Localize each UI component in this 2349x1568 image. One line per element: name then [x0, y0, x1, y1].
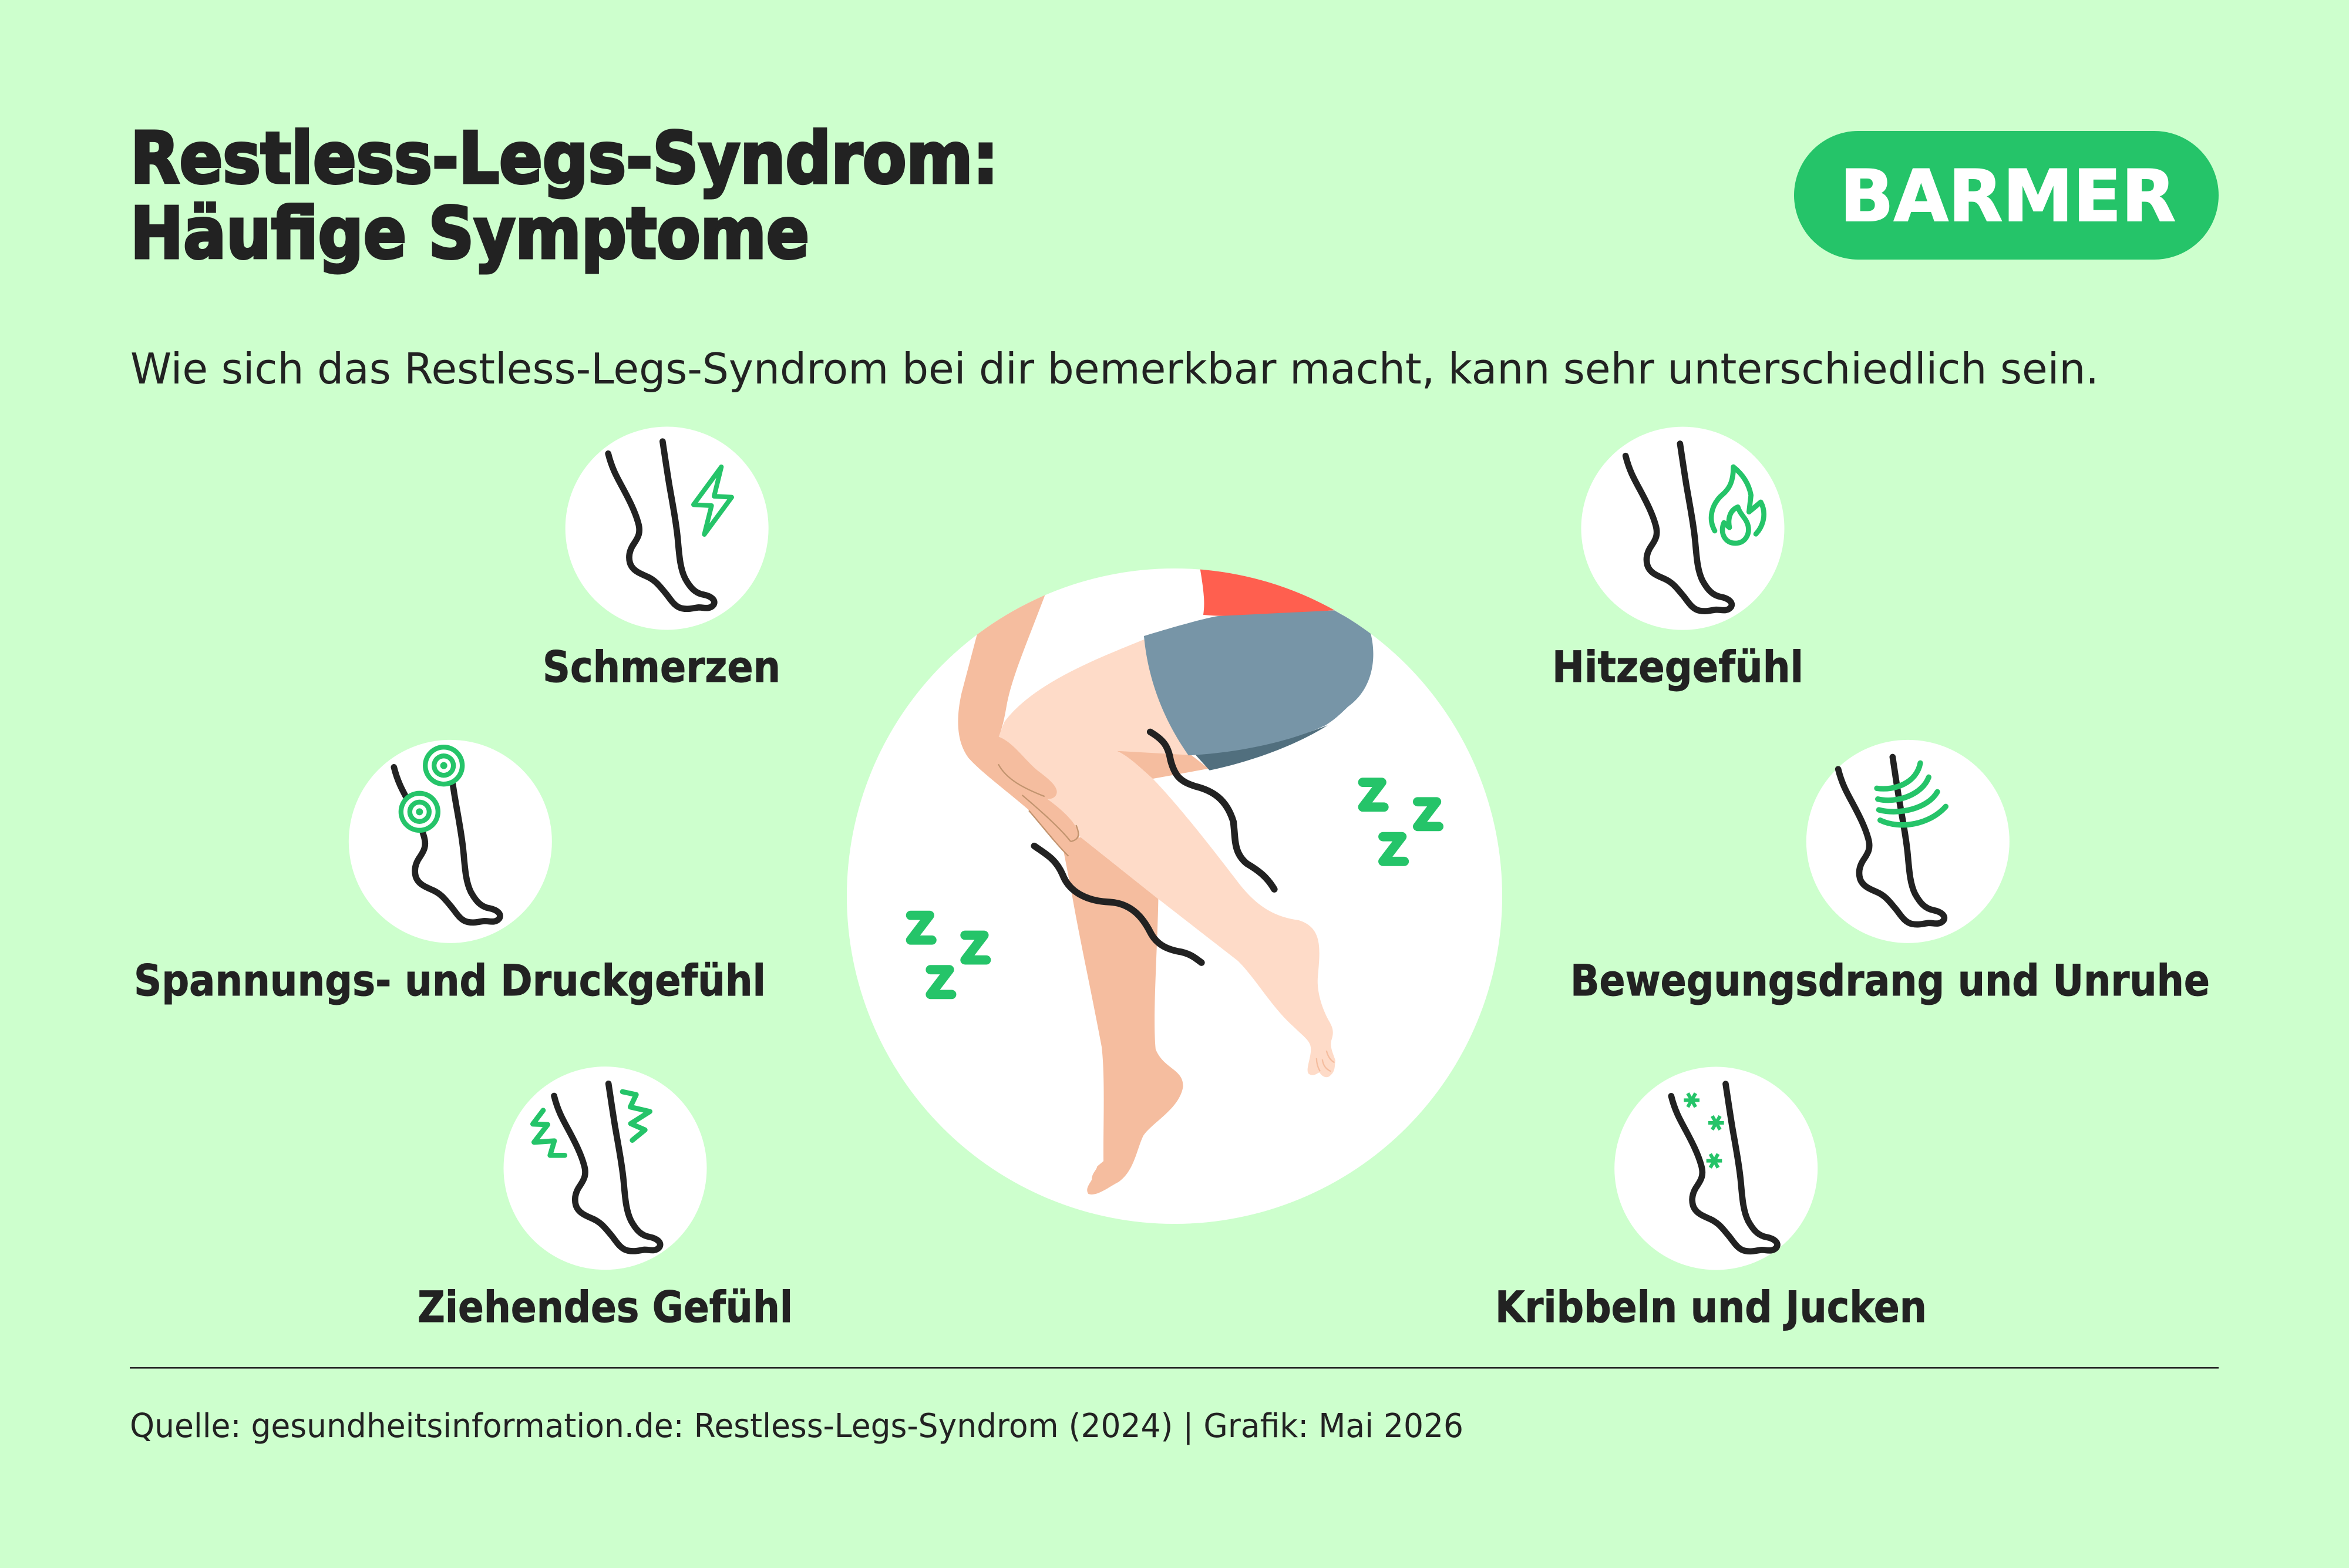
back thigh [1116, 751, 1209, 779]
icon: Ziehendes Gefühl leg with zigzags [503, 1066, 706, 1270]
logo: BARMER: BARMER [1840, 155, 2176, 238]
icon: lightning bolt [694, 467, 732, 534]
right Z cluster [1363, 782, 1439, 862]
icon: left zigzag [533, 1111, 565, 1155]
title: Häufige Symptome [130, 193, 809, 275]
shorts [1144, 610, 1373, 755]
title [130, 118, 998, 275]
label: Spannungs- und Druckgefühl: Spannungs- und Druckgefühl [134, 956, 766, 1006]
icon: inner flame [1722, 507, 1748, 543]
subtitle: Wie sich das Restless-Legs-Syndrom bei dir bemerkbar macht, kann sehr unterschiedlich sein. [130, 344, 2099, 393]
title: Restless-Legs-Syndrom: [130, 118, 998, 200]
icon: Schmerzen leg with lightning [566, 426, 769, 630]
label: Ziehendes Gefühl: Ziehendes Gefühl [418, 1283, 793, 1333]
label: Schmerzen: Schmerzen [543, 642, 780, 692]
icon: Spannungs- und Druckgefühl leg with targets [349, 740, 552, 943]
icon: outer flame [1711, 467, 1764, 534]
icon: Bewegungsdrang leg with motion arcs [1806, 740, 2010, 943]
icon: right zigzag [622, 1092, 650, 1140]
finger lines [998, 764, 1078, 856]
shorts shadow [1195, 725, 1328, 770]
icon: upper target [423, 745, 465, 786]
icon: Hitzegefühl leg with flame [1581, 427, 1784, 630]
toe lines [1317, 1051, 1334, 1071]
source line: Quelle: gesundheitsinformation.de: Restless-Legs-Syndrom (2024) | Grafik: Mai 2026 [130, 1407, 1463, 1445]
label: Hitzegefühl: Hitzegefühl [1552, 642, 1803, 692]
icon: asterisks [1684, 1093, 1724, 1167]
icon: motion arcs [1877, 763, 1946, 825]
icon: Kribbeln leg with asterisks [1614, 1066, 1818, 1270]
logo: BARMER [1794, 131, 2219, 260]
panel: central illustration [847, 561, 1502, 1224]
shirt [1200, 570, 1335, 616]
lower restless squiggle [1034, 846, 1202, 963]
back leg [1062, 837, 1183, 1194]
arm and hand [958, 578, 1079, 856]
upper restless squiggle [1150, 732, 1274, 889]
label: Bewegungsdrang und Unruhe: Bewegungsdrang und Unruhe [1570, 956, 2210, 1006]
front leg [999, 640, 1335, 1077]
label: Kribbeln und Jucken: Kribbeln und Jucken [1495, 1283, 1927, 1333]
icon: lower target [399, 791, 440, 833]
left Z cluster [911, 916, 986, 994]
